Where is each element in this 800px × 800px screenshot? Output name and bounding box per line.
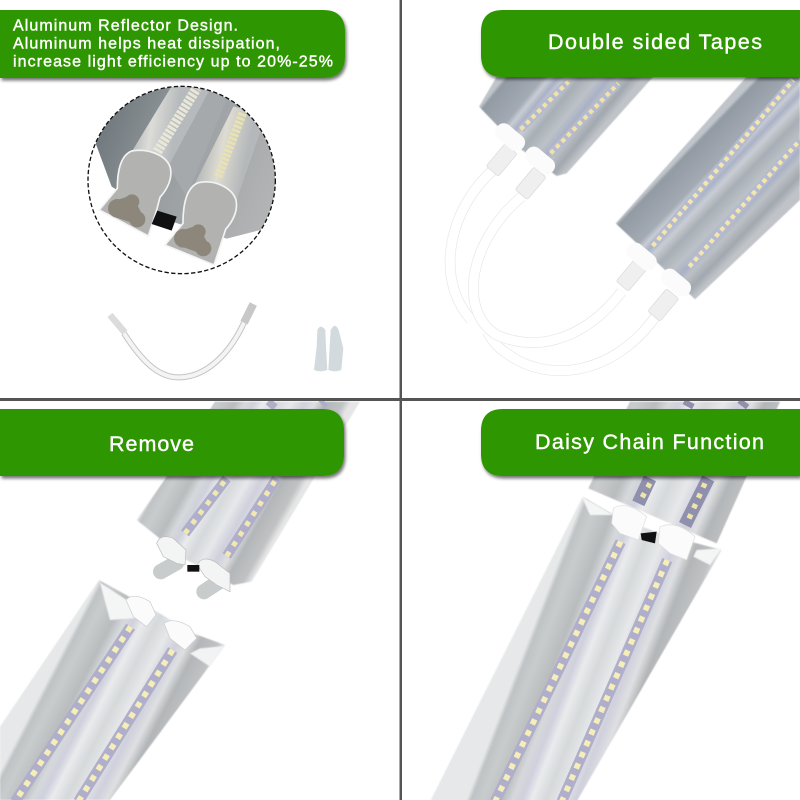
upper tube with plug pins xyxy=(137,402,360,592)
socket right xyxy=(174,224,211,256)
linking cable xyxy=(110,304,253,377)
lower tube xyxy=(0,580,225,800)
upper tube xyxy=(588,402,780,543)
green banner: double sided tapes xyxy=(481,10,800,77)
upper tube xyxy=(479,77,653,176)
product photo: tube separated from plug xyxy=(0,402,360,800)
black connector block xyxy=(152,211,177,231)
green banner: remove xyxy=(0,409,344,476)
product photo: joined tubes xyxy=(430,402,780,800)
green banner: daisy chain function xyxy=(481,409,800,476)
product photo: reflector close-up, cable and anchors xyxy=(80,80,343,377)
banner text xyxy=(13,18,333,70)
banner text: Aluminum helps heat dissipation, xyxy=(13,36,280,52)
end cap left xyxy=(99,150,171,236)
banner text: Aluminum Reflector Design. xyxy=(13,18,238,34)
cables xyxy=(450,168,657,371)
cable connectors and end caps xyxy=(486,120,694,321)
panel: daisy chain function xyxy=(430,402,800,800)
green banner: aluminum reflector xyxy=(0,10,345,78)
panel: remove xyxy=(0,402,360,800)
dashed circle outline xyxy=(88,86,275,274)
banner text: Double sided Tapes xyxy=(548,30,762,54)
magnified circle of tube end caps xyxy=(80,80,283,274)
end cap right xyxy=(165,182,237,265)
panel: double sided tapes xyxy=(450,10,800,371)
socket left xyxy=(108,194,145,227)
banner text: Remove xyxy=(109,432,194,456)
banner text: Daisy Chain Function xyxy=(535,430,764,454)
panel: aluminum reflector design xyxy=(0,10,345,377)
lower tube xyxy=(616,77,800,299)
plastic wall anchors xyxy=(314,326,343,371)
banner text: increase light efficiency up to 20%-25% xyxy=(13,54,333,70)
product photo: two tubes with white cables xyxy=(450,77,800,371)
lower tube xyxy=(430,497,722,800)
